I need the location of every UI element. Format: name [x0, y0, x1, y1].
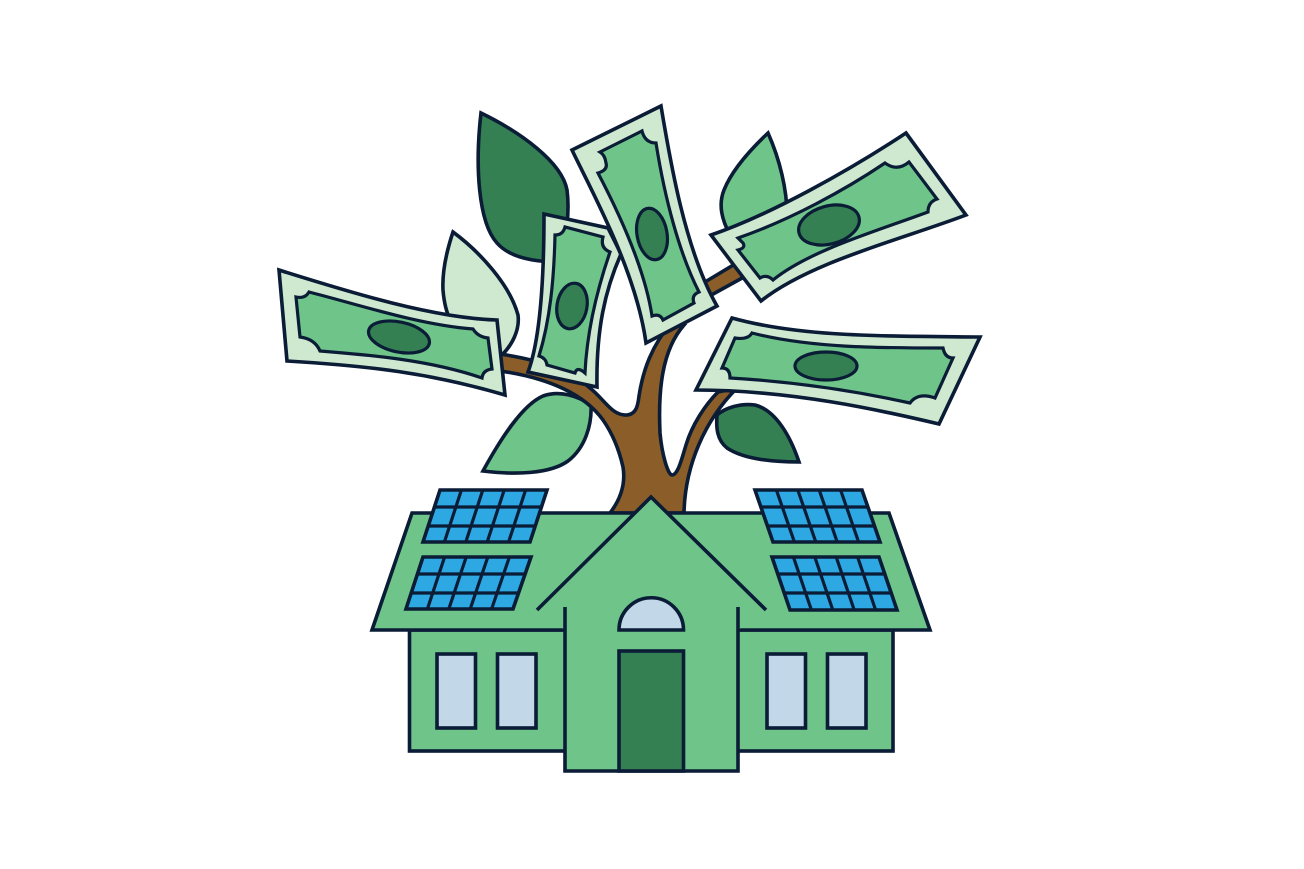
- solar panel: upper left: [423, 490, 547, 542]
- dollar bills: [279, 106, 980, 424]
- house: [372, 490, 930, 771]
- trunk: [500, 322, 737, 513]
- solar panel: lower left: [406, 557, 531, 609]
- bill: top centre: [572, 106, 717, 343]
- leaf: pale left: [443, 232, 518, 355]
- solar panel: lower right: [772, 557, 897, 610]
- roof: [372, 513, 930, 630]
- bill: upper right: [711, 133, 966, 301]
- door: [619, 651, 684, 771]
- bill: far left: [279, 270, 505, 395]
- leaf: dark green top: [478, 113, 568, 262]
- front gable fill: [537, 495, 766, 771]
- front gable outline: [537, 497, 766, 610]
- house body: right wing: [733, 630, 893, 751]
- tree trunk and branches: [500, 264, 744, 513]
- branch: upper right: [700, 264, 744, 298]
- leaf: green top right: [721, 133, 787, 235]
- leaf: green lower left: [483, 394, 591, 473]
- bill: lower right: [696, 318, 980, 424]
- bill: inner left: [528, 214, 621, 387]
- arched window: [619, 598, 684, 630]
- front wall outline: [565, 607, 738, 771]
- leaves behind the tree: [443, 113, 799, 473]
- leaf: dark green lower right: [717, 405, 799, 462]
- windows: [437, 654, 866, 728]
- house body: left wing: [410, 630, 570, 751]
- solar panel: upper right: [755, 490, 880, 542]
